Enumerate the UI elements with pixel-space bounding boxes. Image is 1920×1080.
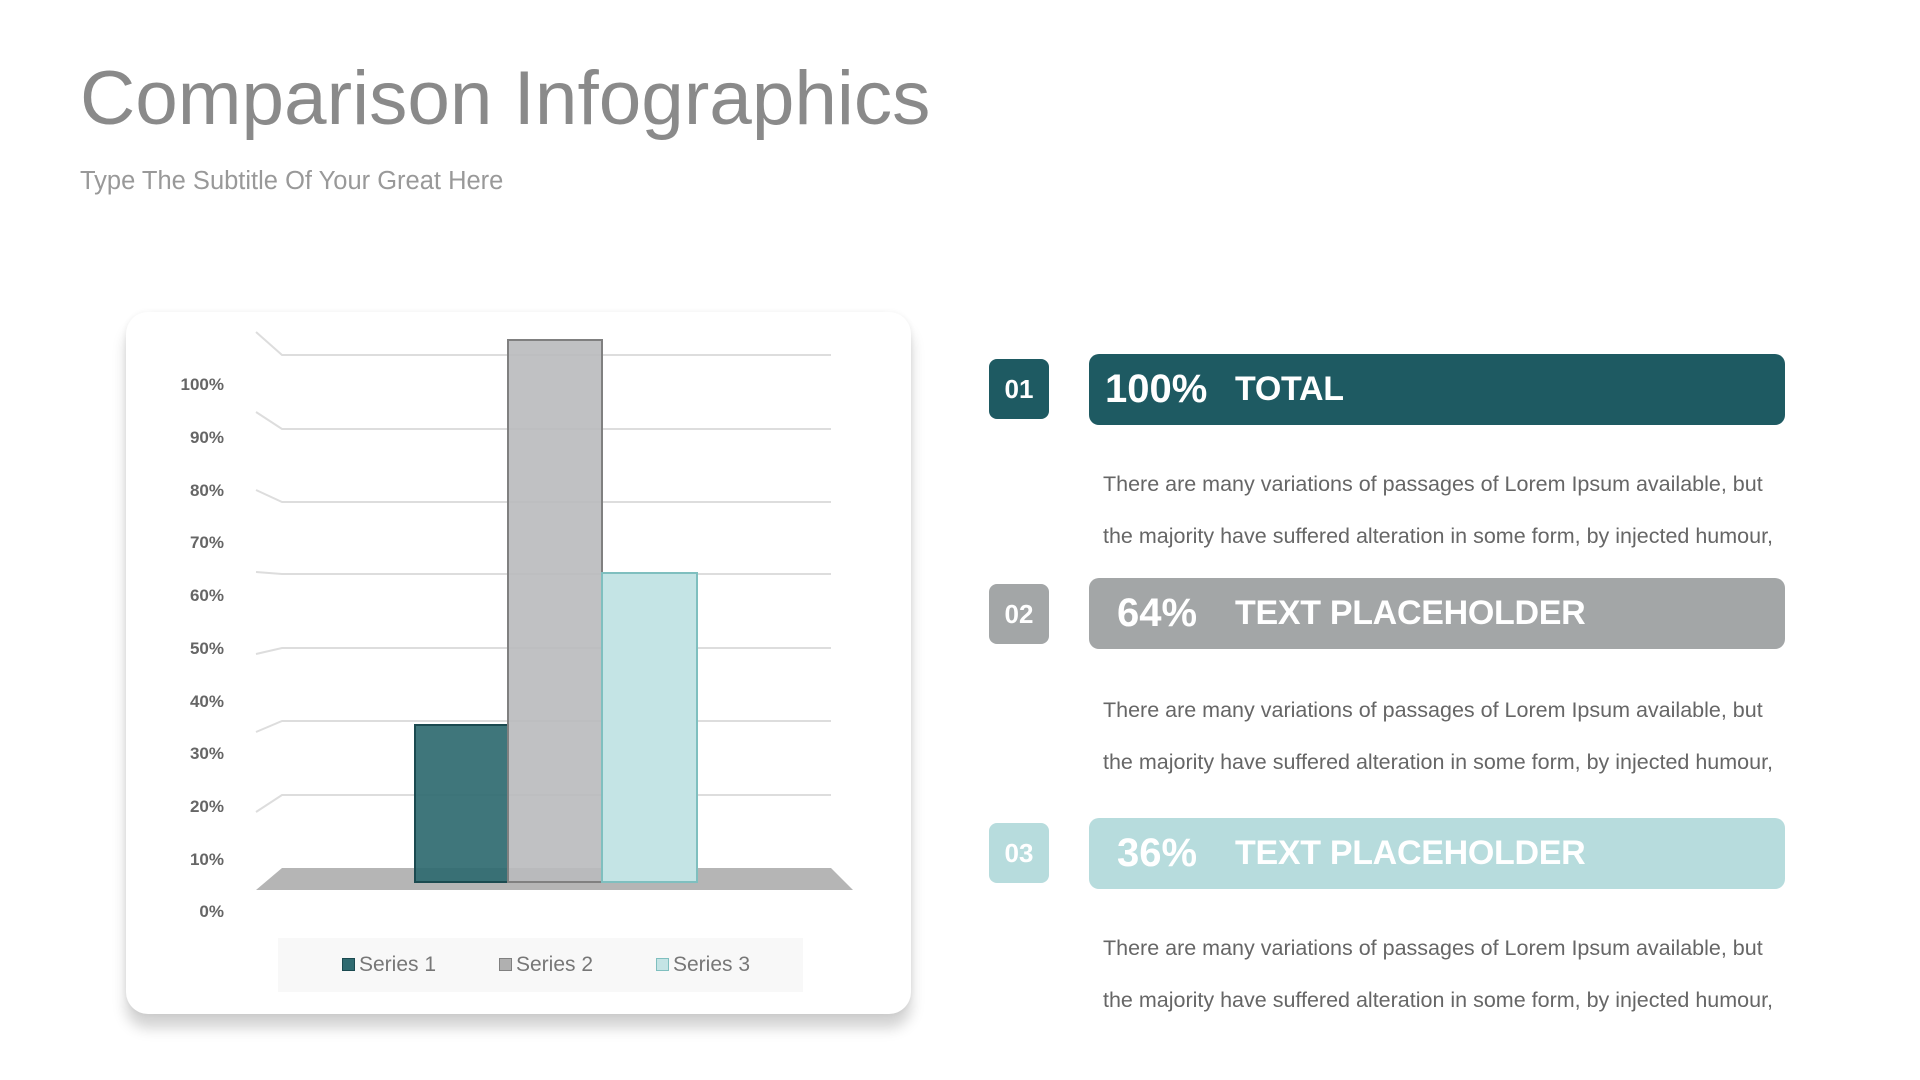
y-axis labels	[181, 375, 224, 921]
y-axis labels: 10%	[190, 850, 224, 869]
y-axis labels: 80%	[190, 481, 224, 500]
y-axis labels: 50%	[190, 639, 224, 658]
bar: series 3	[602, 573, 697, 882]
legend	[278, 938, 803, 992]
y-axis labels: 0%	[199, 902, 224, 921]
number badge 02: 02	[1005, 599, 1033, 629]
y-axis labels: 70%	[190, 533, 224, 552]
title: Comparison Infographics	[80, 56, 930, 141]
item 02	[989, 578, 1785, 774]
legend: Series 2	[516, 953, 593, 976]
bar: series 2	[508, 340, 602, 882]
item 03	[989, 818, 1785, 1012]
legend: Series 3	[673, 953, 750, 976]
header bar 03: 36%	[1117, 831, 1197, 875]
y-axis labels: 30%	[190, 744, 224, 763]
floor	[256, 868, 853, 890]
panel: chart card	[126, 312, 911, 1014]
text 01	[1103, 472, 1773, 548]
subtitle: Type The Subtitle Of Your Great Here	[80, 167, 503, 195]
number badge 02	[989, 584, 1049, 644]
y-axis labels: 40%	[190, 692, 224, 711]
text 01: There are many variations of passages of Lorem Ipsum available, but	[1103, 472, 1763, 496]
header bar 01	[1089, 354, 1785, 425]
bar: series 1	[415, 725, 508, 882]
legend: Series 1	[359, 953, 436, 976]
number badge 01	[989, 359, 1049, 419]
header bar 02: TEXT PLACEHOLDER	[1235, 594, 1585, 632]
header bar 01: TOTAL	[1235, 370, 1344, 408]
number badge 01: 01	[1005, 374, 1033, 404]
text 01: the majority have suffered alteration in some form, by injected humour,	[1103, 524, 1773, 548]
number badge 03: 03	[1005, 838, 1033, 868]
y-axis labels: 20%	[190, 797, 224, 816]
text 02	[1103, 698, 1773, 774]
text 02: There are many variations of passages of Lorem Ipsum available, but	[1103, 698, 1763, 722]
y-axis labels: 60%	[190, 586, 224, 605]
y-axis labels: 90%	[190, 428, 224, 447]
header bar 03	[1089, 818, 1785, 889]
text 03: the majority have suffered alteration in some form, by injected humour,	[1103, 988, 1773, 1012]
header bar 02: 64%	[1117, 591, 1197, 635]
header bar 03: TEXT PLACEHOLDER	[1235, 834, 1585, 872]
text 03	[1103, 936, 1773, 1012]
y-axis labels: 100%	[181, 375, 224, 394]
text 03: There are many variations of passages of Lorem Ipsum available, but	[1103, 936, 1763, 960]
text 02: the majority have suffered alteration in some form, by injected humour,	[1103, 750, 1773, 774]
header bar 01: 100%	[1105, 367, 1207, 411]
item 01	[989, 354, 1785, 548]
header bar 02	[1089, 578, 1785, 649]
number badge 03	[989, 823, 1049, 883]
